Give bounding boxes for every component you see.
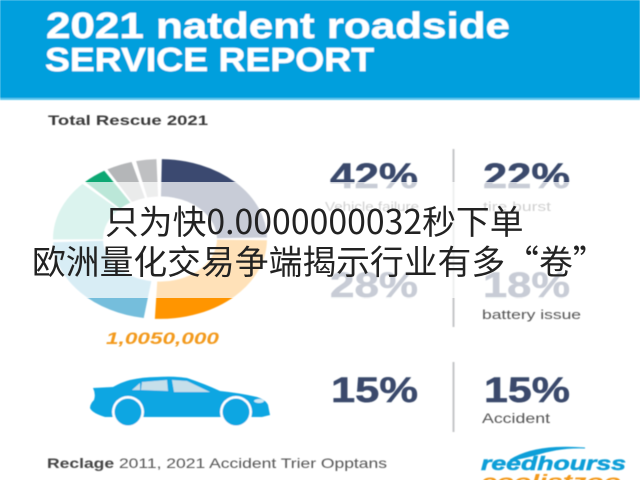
title — [45, 5, 510, 78]
stat: 15% accident: Accident — [482, 410, 550, 426]
title: SERVICE REPORT — [45, 41, 374, 78]
overlay caption: 欧洲量化交易争端揭示行业有多“卷” — [32, 235, 607, 284]
stat: 42% vehicle failure — [325, 157, 419, 214]
overlay caption: 只为快0.0000000032秒下单 — [105, 195, 524, 244]
stat: 15% accident: 15% — [484, 371, 570, 410]
stat: 42% vehicle failure: Vehicle failure — [325, 199, 419, 214]
donut chart — [78, 178, 242, 300]
stat: 18% battery issue — [482, 266, 581, 322]
stat: 15% accident — [482, 371, 570, 426]
vertical divider top — [452, 149, 454, 327]
stat: 28%: 28% — [330, 266, 418, 305]
stat: 22% tire burst: tire burst — [483, 199, 552, 214]
stat: 42% vehicle failure: 42% — [330, 157, 418, 196]
header banner — [0, 0, 640, 100]
stat: 22% tire burst: 22% — [483, 157, 570, 196]
translucent caption band — [0, 182, 640, 298]
stat: 18% battery issue: battery issue — [482, 307, 581, 322]
vertical divider bottom — [452, 362, 454, 432]
footer caption: Reclage 2011, 2021 Accident Trier Opptans — [47, 455, 387, 471]
heading: total rescue: Total Rescue 2021 — [48, 112, 208, 128]
stat: 15%: 15% — [331, 371, 418, 410]
donut total value: 1,0050,000 — [106, 329, 220, 348]
icon: blue car — [90, 377, 270, 428]
title: 2021 natdent roadside — [46, 5, 510, 46]
logo — [481, 447, 626, 480]
overlay caption — [32, 195, 607, 284]
stat: 22% tire burst — [483, 157, 570, 214]
stat: 18% battery issue: 18% — [483, 266, 570, 305]
logo: reedhourss — [481, 454, 626, 475]
